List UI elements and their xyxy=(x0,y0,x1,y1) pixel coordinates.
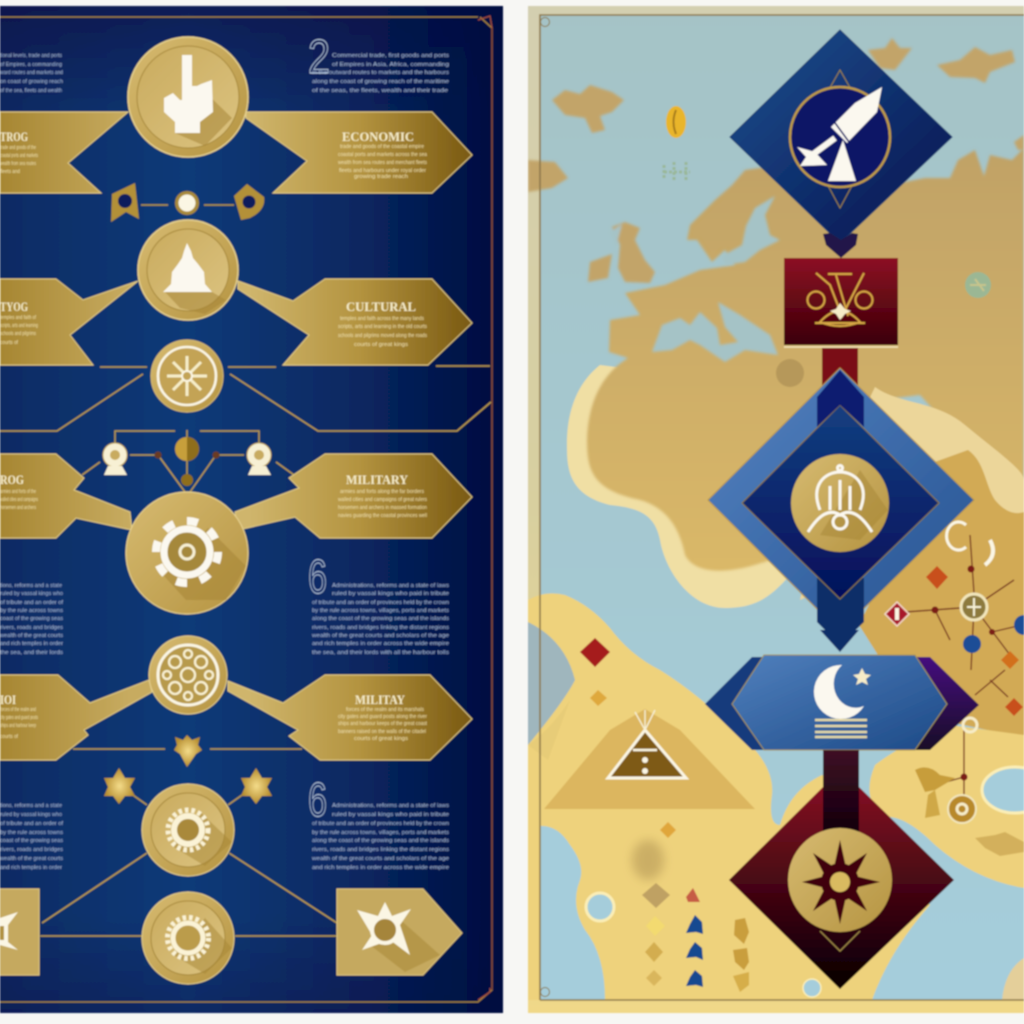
icon: spokes xyxy=(167,356,207,396)
banner: military left xyxy=(0,454,132,538)
connector: upper navy cap xyxy=(817,370,864,427)
banner: military right: walled cities and campaigns of great rulers xyxy=(337,497,427,503)
banner: cultural left: temples and faith of xyxy=(0,315,36,321)
banner: cultural right: courts of great kings xyxy=(354,342,408,348)
connector row: pins and dot xyxy=(111,183,264,222)
banner: economic left: wealth from sea routes xyxy=(0,161,36,167)
icon: shell crest xyxy=(808,466,872,532)
map: eastern land patch xyxy=(975,832,1024,856)
text block: row seven right with numeral: by the rule across towns, villages, ports and markets xyxy=(312,830,449,836)
text block: row six right with numeral: 6 xyxy=(308,551,327,604)
panel: lower right arrow with star xyxy=(337,889,462,975)
banner: cultural right: temples and faith across the many lands xyxy=(340,316,424,322)
banner: economic left: TROG xyxy=(0,129,28,144)
text block: top right notes with numeral: 2 xyxy=(308,31,330,84)
map: baltic and mediterranean seas xyxy=(652,196,780,362)
banner: lower left: courts of xyxy=(0,734,18,740)
text block: row six right with numeral: along the coast of the growing seas and the islands xyxy=(312,616,449,622)
banner: economic right: growing trade reach xyxy=(354,174,408,180)
connector lines: middle xyxy=(0,366,491,492)
text block: top left notes: of Empires, a commanding xyxy=(0,62,62,68)
map: eastern lagoon xyxy=(982,767,1024,813)
map markers: top left xyxy=(664,106,991,298)
banner: military right: armies and forts along the far borders xyxy=(340,489,424,495)
text block: row seven right with numeral: Administrations, reforms and a state of laws xyxy=(332,803,449,809)
coin: hand and tower icon xyxy=(128,37,248,157)
icon: dark star xyxy=(802,840,880,924)
text block: row seven right with numeral: 6 xyxy=(308,774,327,827)
text block: row seven right with numeral: along the coast of the growing seas and the islands xyxy=(312,838,449,844)
panel: map infographic xyxy=(528,6,1024,1013)
text block: row seven right with numeral: of tribute and an order of provinces held by the crown xyxy=(312,821,449,827)
map: southwestern land xyxy=(528,593,930,1000)
text block: row six right with numeral xyxy=(308,551,449,656)
icon: star ring xyxy=(357,902,411,955)
banner: military left: horsemen and archers xyxy=(0,505,36,511)
text block: row seven left: wealth of the great courts xyxy=(0,856,63,862)
map: eastern yellow land xyxy=(869,725,1024,888)
map: islands xyxy=(528,38,1024,192)
corner ornaments xyxy=(478,16,492,1000)
banner: lower right: MILITAY xyxy=(355,692,406,707)
coin: sun wheel xyxy=(151,340,223,412)
banner: lower right: ships and harbour keeps of the great coast xyxy=(338,721,427,727)
text block: top right notes with numeral: of the seas, the fleets, wealth and their trade xyxy=(312,88,448,94)
map: southwestern bay xyxy=(540,826,605,1000)
text block: top right notes with numeral: in the outward routes to markets and the harbours xyxy=(312,70,449,76)
connector: dark bar xyxy=(823,750,859,836)
banner: military right: MILITARY xyxy=(346,472,409,487)
icon: hand xyxy=(164,55,213,133)
banner: lower left: city gates and guard posts xyxy=(0,715,38,721)
chain: red square xyxy=(784,258,898,347)
map: british isles xyxy=(588,222,655,283)
connector: row lines and star xyxy=(73,735,302,767)
banner: lower right: city gates and guard posts along the river xyxy=(338,714,427,720)
text block: row six right with numeral: ruled by vassal kings who paid in tribute xyxy=(332,591,449,597)
banner: economic left: trade and goods of the xyxy=(0,145,36,151)
text block: row seven right with numeral: rivers, roads and bridges linking the distant regions xyxy=(312,847,449,853)
text block: row seven left xyxy=(0,803,64,871)
chain: bottom maroon diamond xyxy=(729,787,954,989)
text block: row six right with numeral: and rich temples in order across the wide empire xyxy=(312,641,449,647)
coin: gear icon xyxy=(126,492,248,614)
map: golden plateau xyxy=(859,450,1024,738)
banner: economic right: trade and goods of the coastal empire xyxy=(340,144,424,150)
banner: military right: horsemen and archers in massed formation xyxy=(338,505,427,511)
text block: row six left: ruled by vassal kings who xyxy=(0,591,63,597)
text block: row seven right with numeral: wealth of the great courts and scholars of the age xyxy=(311,856,449,862)
map: southeastern land corner xyxy=(1002,958,1024,1000)
banner: economic right: ECONOMIC xyxy=(342,129,414,144)
text block: top left notes: of the sea, fleets and wealth xyxy=(0,88,62,94)
banner: economic right: coastal ports and markets across the sea xyxy=(338,152,427,158)
text block: row seven left: of tribute and an order of xyxy=(0,821,64,827)
text block: row seven left: coast of the growing seas xyxy=(0,838,63,844)
panel: navy infographic xyxy=(0,6,503,1013)
banner: military left: armies and forts of the xyxy=(0,489,36,495)
text block: row six right with numeral: by the rule across towns, villages, ports and markets xyxy=(312,608,449,614)
connector: lower tube xyxy=(817,578,864,645)
coin: patterned medallion xyxy=(149,636,227,714)
banner: cultural left xyxy=(0,279,138,365)
icon: square star xyxy=(0,912,18,950)
banner: military left: walled cities and campaigns xyxy=(0,497,38,503)
map: patterned terrain patch xyxy=(776,359,804,387)
banner: cultural right xyxy=(238,279,472,365)
text block: row six left: wealth of the great courts xyxy=(0,633,63,639)
map: cream highlands xyxy=(800,387,1024,600)
map markers: left cluster xyxy=(580,638,821,997)
text block: top right notes with numeral: of Empires in Asia, Africa, commanding xyxy=(332,62,449,68)
text block: top right notes with numeral xyxy=(308,31,449,94)
text block: row seven right with numeral: ruled by vassal kings who paid in tribute xyxy=(332,812,449,818)
coin: sun gear upper xyxy=(142,784,234,876)
text block: row six right with numeral: Administrations, reforms and a state of laws xyxy=(332,583,449,589)
banner: cultural left: TYOG xyxy=(0,299,28,314)
banner: lower left: forces of the realm and xyxy=(0,707,36,713)
text block: row seven right with numeral: and rich temples in order across the wide empire xyxy=(312,865,449,871)
text block: top left notes: ward routes and markets and xyxy=(0,70,63,76)
coin: sun gear lower xyxy=(142,892,234,984)
text block: row six right with numeral: of tribute and an order of provinces held by the crown xyxy=(312,600,449,606)
banner: cultural left: courts of xyxy=(0,340,18,346)
banner: lower left: ships and harbour keep xyxy=(0,723,36,729)
map: pyramid plateau xyxy=(544,709,755,809)
map: eurasia and africa xyxy=(587,148,1024,571)
text block: top right notes with numeral: Commercial trade, first goods and ports xyxy=(332,53,449,59)
text block: row six left: tions, reforms and a state xyxy=(0,583,62,589)
arrow: blue down xyxy=(820,630,859,652)
banner: cultural left: scripts, arts and learning xyxy=(0,323,38,329)
text block: top right notes with numeral: along the coast of growing reach of the maritime xyxy=(312,79,449,85)
text block: row seven left: by the rule across towns xyxy=(0,830,63,836)
banner: economic left: fleets and xyxy=(0,169,20,175)
icon: gear xyxy=(156,521,218,583)
banner: economic right: wealth from sea routes and merchant fleets xyxy=(337,160,427,166)
text block: row seven right with numeral xyxy=(308,774,449,871)
banner: lower left: IOI xyxy=(0,692,16,707)
arrow: heart connector xyxy=(823,233,858,258)
banner: economic left xyxy=(0,112,128,193)
text block: top left notes xyxy=(0,53,63,94)
icons: three small medallions xyxy=(103,437,271,486)
connector: red bar xyxy=(822,348,858,404)
banner: military right xyxy=(235,454,472,538)
text block: row seven left: rivers, roads and bridges xyxy=(0,847,63,853)
text block: top left notes: on coast of growing reach xyxy=(0,79,63,85)
text block: row seven left: and rich temples in order xyxy=(0,865,62,871)
text block: row six left xyxy=(0,583,64,656)
banner: economic left: coastal ports and markets xyxy=(0,153,38,159)
text block: row seven left: tions, reforms and a state xyxy=(0,803,62,809)
icons: two stars xyxy=(104,768,272,805)
text block: row six right with numeral: rivers, roads and bridges linking the distant regions xyxy=(312,625,449,631)
text block: top left notes: tional levels, trade and ports xyxy=(0,53,62,59)
map: africa shoreline rim xyxy=(567,365,880,608)
text block: row six right with numeral: the sea, and their lords with all the harbour tolls xyxy=(312,650,449,656)
banner: economic right: fleets and harbours under royal order xyxy=(339,168,426,174)
connector: diagonal and horizontal lines xyxy=(40,853,337,936)
text block: row six left: and rich temples in order xyxy=(0,641,63,647)
banner: economic right xyxy=(246,112,472,193)
banner: military right: navies guarding the coastal provinces well xyxy=(338,513,427,519)
icon: crescent and star xyxy=(814,665,871,737)
chain: central blue diamond xyxy=(708,368,974,645)
chain: hex banner with crescent xyxy=(705,655,979,750)
text block: row six left: coast of the growing seas xyxy=(0,616,63,622)
icon: lattice pattern xyxy=(163,650,213,700)
panel: lower left square xyxy=(0,889,39,975)
text block: row six left: the sea, and their lords xyxy=(0,650,63,656)
text block: row six left: rivers, roads and bridges xyxy=(0,625,63,631)
banner: cultural right: schools and pilgrims moved along the roads xyxy=(338,333,427,339)
banner: lower right: courts of great kings xyxy=(354,736,408,742)
banner: cultural left: schools and pilgrims xyxy=(0,331,36,337)
icon: pyramid tent xyxy=(608,710,686,778)
chain: top diamond xyxy=(730,30,952,243)
map: southwestern gulf xyxy=(528,622,575,745)
coin: stupa icon xyxy=(138,220,238,320)
icon: crest xyxy=(808,273,872,326)
banner: lower left xyxy=(0,675,152,760)
banner: cultural right: CULTURAL xyxy=(346,299,416,314)
text block: row six right with numeral: wealth of the great courts and scholars of the age xyxy=(311,633,449,639)
icon: gear xyxy=(168,810,208,850)
text block: row six left: of tribute and an order of xyxy=(0,600,64,606)
frame: map border xyxy=(540,15,1024,1000)
icon: rocket xyxy=(797,87,882,181)
banner: lower right: banners raised on the walls of the citadel xyxy=(338,729,426,735)
text block: row seven left: ruled by vassal kings who xyxy=(0,812,62,818)
icon: stupa xyxy=(163,243,212,292)
banner: military left: ROG xyxy=(0,472,24,487)
banner: lower right xyxy=(228,675,472,760)
banner: cultural right: scripts, arts and learning in the old courts xyxy=(338,324,427,330)
icon: gear xyxy=(168,918,208,958)
banner: lower right: forces of the realm and its marshals xyxy=(346,707,424,713)
network: map markers on right xyxy=(885,522,1024,823)
text block: row six left: by the rule across towns xyxy=(0,608,63,614)
